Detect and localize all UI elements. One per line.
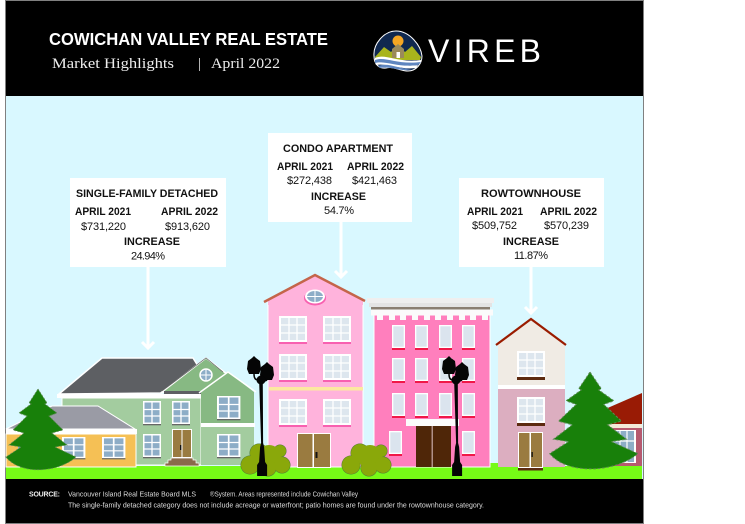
lamp post: right bbox=[442, 356, 469, 476]
panel: single-family detached: APRIL 2021 bbox=[75, 206, 131, 218]
subtitle: April 2022 bbox=[211, 56, 280, 72]
building: single-family house bbox=[57, 358, 256, 466]
panel: single-family detached bbox=[70, 178, 226, 267]
footer source: SOURCE: bbox=[29, 492, 60, 498]
panel: condo apartment: CONDO APARTMENT bbox=[283, 143, 393, 155]
lamp post: left bbox=[247, 356, 274, 476]
panel: condo apartment bbox=[268, 133, 412, 222]
header band bbox=[6, 1, 643, 96]
panel: condo apartment: $421,463 bbox=[352, 175, 397, 187]
arrow: condo bbox=[335, 222, 347, 277]
panel: condo apartment: 54.7% bbox=[324, 205, 354, 217]
footer source: ®System. Areas represented include Cowichan Valley bbox=[210, 490, 358, 498]
panel: condo apartment: INCREASE bbox=[311, 191, 366, 203]
arrow: single-family bbox=[142, 267, 154, 348]
bush: right bbox=[342, 444, 392, 476]
logo wordmark: VIREB bbox=[428, 33, 541, 69]
tree: left bbox=[6, 389, 76, 470]
subtitle: Market Highlights bbox=[52, 56, 174, 72]
panel: rowtownhouse: $509,752 bbox=[472, 220, 517, 232]
footer source: Vancouver Island Real Estate Board MLS bbox=[68, 492, 196, 498]
panel: condo apartment: APRIL 2022 bbox=[347, 161, 404, 173]
building: rowtownhouse bbox=[496, 319, 566, 470]
subtitle: | bbox=[198, 56, 201, 72]
subtitle bbox=[52, 56, 280, 72]
panel: rowtownhouse: 11.87% bbox=[514, 250, 548, 262]
building: condo apartment bbox=[264, 275, 365, 468]
footer note: The single-family detached category does not include acreage or waterfront; patio homes are found under the rowtownhouse category. bbox=[68, 502, 484, 510]
panel: condo apartment: APRIL 2021 bbox=[277, 161, 333, 173]
bush: left bbox=[240, 444, 290, 476]
title: COWICHAN VALLEY REAL ESTATE bbox=[49, 29, 328, 49]
footer band bbox=[6, 479, 643, 523]
panel: rowtownhouse: APRIL 2022 bbox=[540, 206, 597, 218]
panel: rowtownhouse: $570,239 bbox=[544, 220, 589, 232]
panel: rowtownhouse: INCREASE bbox=[503, 236, 559, 248]
panel: rowtownhouse: APRIL 2021 bbox=[467, 206, 523, 218]
sky bbox=[6, 96, 643, 479]
footer source bbox=[29, 490, 358, 498]
tree: right bbox=[550, 372, 638, 469]
panel: rowtownhouse: ROWTOWNHOUSE bbox=[481, 188, 581, 200]
panel: single-family detached: SINGLE-FAMILY DETACHED bbox=[76, 188, 218, 200]
building: orange annex bbox=[6, 406, 137, 467]
panel: rowtownhouse bbox=[459, 178, 604, 267]
building: right red-roof house bbox=[600, 393, 642, 466]
panel: single-family detached: INCREASE bbox=[124, 236, 180, 248]
panel: single-family detached: APRIL 2022 bbox=[161, 206, 218, 218]
building: pink apartment bbox=[367, 298, 494, 467]
panel: single-family detached: $731,220 bbox=[81, 221, 126, 233]
panel: single-family detached: 24.94% bbox=[131, 250, 165, 262]
panel: condo apartment: $272,438 bbox=[287, 175, 332, 187]
panel: single-family detached: $913,620 bbox=[165, 221, 210, 233]
arrow: rowtownhouse bbox=[525, 267, 537, 313]
grass bbox=[6, 463, 642, 479]
icon: VIREB logo bbox=[374, 31, 422, 71]
